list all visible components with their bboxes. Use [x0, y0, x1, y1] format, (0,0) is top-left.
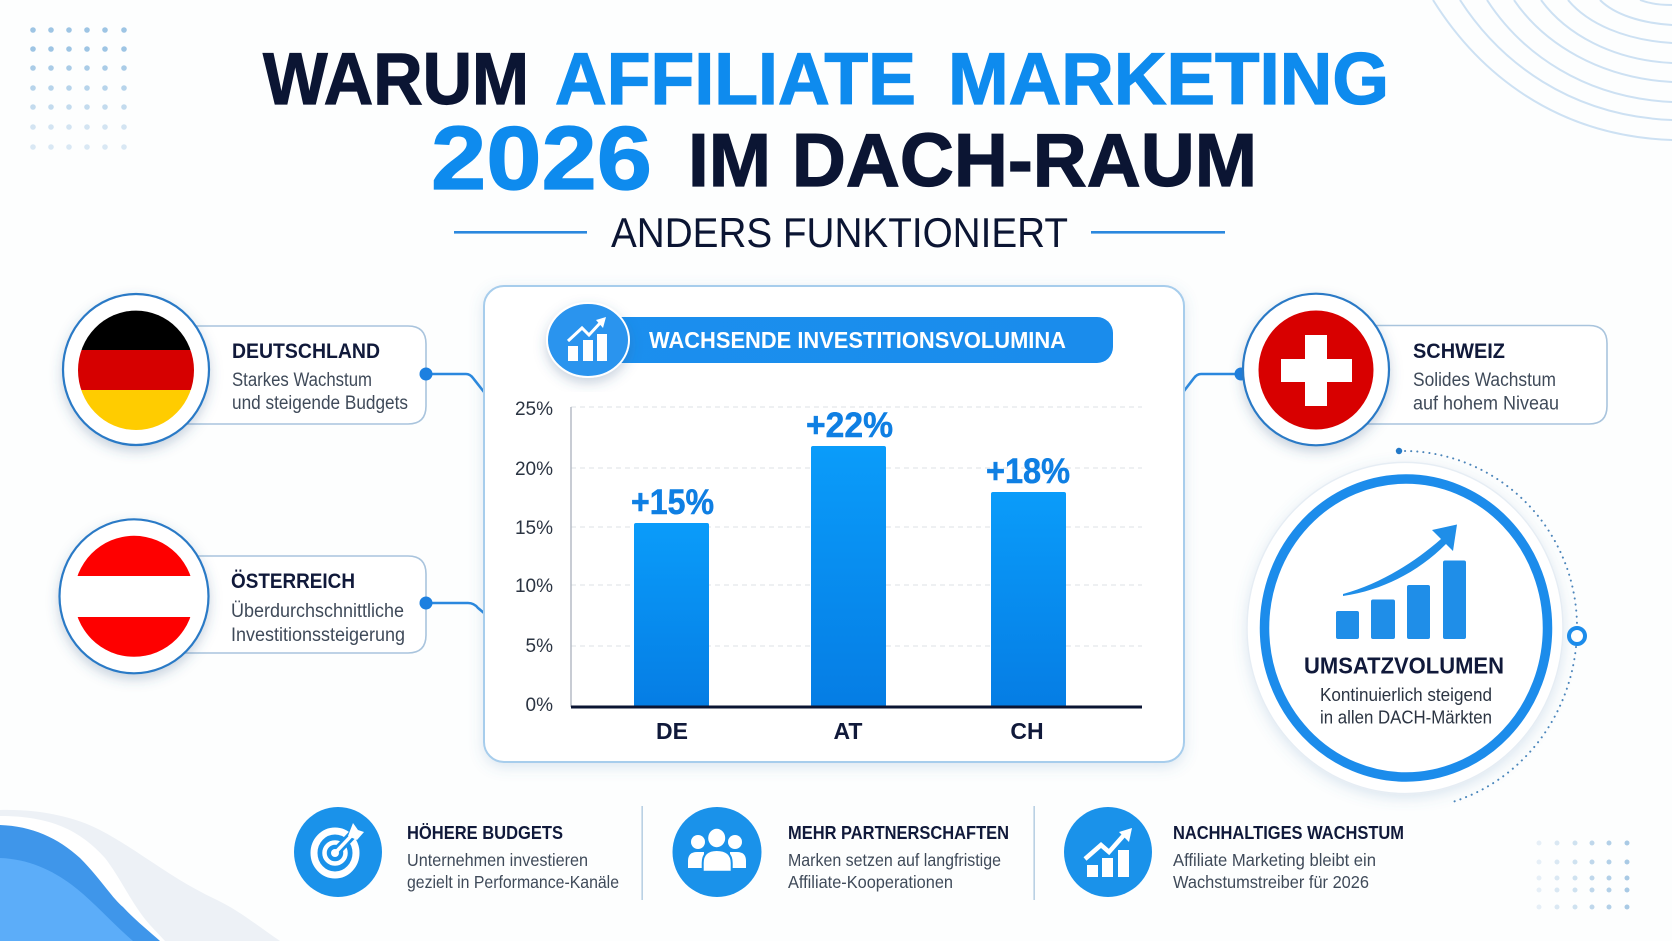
title — [263, 37, 1389, 209]
ring — [1264, 479, 1548, 777]
y axis labels: 15% — [515, 518, 553, 539]
text — [407, 850, 619, 892]
text: Marken setzen auf langfristige — [788, 850, 1001, 870]
subtitle: ANDERS FUNKTIONIERT — [611, 209, 1068, 256]
bar chart — [515, 399, 1142, 744]
card text: auf hohem Niveau — [1413, 394, 1559, 414]
text — [1320, 684, 1492, 728]
heading: MEHR PARTNERSCHAFTEN — [788, 823, 1009, 843]
card text: Überdurchschnittliche — [231, 601, 404, 622]
panel: chart — [484, 286, 1184, 762]
icon: rising bars with arrow — [1336, 524, 1466, 639]
heading: HÖHERE BUDGETS — [407, 823, 563, 843]
title: AFFILIATE — [555, 37, 916, 120]
x axis labels — [656, 718, 1044, 744]
heading: UMSATZVOLUMEN — [1304, 652, 1504, 678]
y axis — [570, 407, 572, 707]
x axis labels: AT — [834, 718, 862, 744]
flag: Deutschland — [63, 294, 209, 445]
chart header: WACHSENDE INVESTITIONSVOLUMINA — [649, 327, 1066, 353]
text: in allen DACH-Märkten — [1320, 706, 1492, 728]
card: Schweiz — [1360, 326, 1607, 424]
card heading: SCHWEIZ — [1413, 339, 1505, 363]
text: gezielt in Performance-Kanäle — [407, 872, 619, 892]
bar: AT: +22% — [806, 406, 893, 445]
decorative dot grid bottom right — [1536, 840, 1630, 910]
text — [788, 850, 1001, 892]
card text — [231, 601, 405, 646]
bar: DE: +15% — [631, 483, 714, 522]
connector dot: Schweiz — [1234, 368, 1248, 380]
dotted orbit — [1396, 448, 1585, 803]
card text: und steigende Budgets — [232, 393, 408, 414]
feature: Nachhaltiges Wachstum — [1064, 807, 1404, 897]
connector: Schweiz — [1184, 374, 1242, 391]
y axis labels — [515, 399, 553, 716]
decorative arcs top right — [1433, 0, 1672, 140]
card: Österreich — [180, 556, 432, 653]
bar: CH — [986, 452, 1070, 707]
bar: DE — [631, 483, 714, 707]
panel: Umsatzvolumen — [1247, 462, 1563, 794]
text: Unternehmen investieren — [407, 850, 588, 870]
heading: NACHHALTIGES WACHSTUM — [1173, 823, 1404, 843]
card text: Investitionssteigerung — [231, 625, 405, 646]
flag: Österreich — [60, 519, 208, 673]
icon: people — [672, 807, 762, 897]
x axis — [571, 706, 1142, 708]
connector: Österreich — [426, 603, 484, 613]
text: Kontinuierlich steigend — [1320, 684, 1492, 705]
flag: Schweiz — [1243, 294, 1389, 445]
feature: Höhere Budgets — [294, 807, 619, 897]
decorative dot grid top left — [30, 27, 127, 150]
decorative waves bottom left — [0, 810, 280, 941]
divider — [1034, 806, 1035, 900]
y axis labels: 5% — [526, 636, 553, 657]
title: WARUM — [263, 37, 529, 120]
y axis labels: 25% — [515, 399, 553, 420]
text: Wachstumstreiber für 2026 — [1173, 872, 1369, 892]
x axis labels: DE — [656, 718, 688, 744]
card: Deutschland — [180, 326, 432, 424]
title: IM DACH-RAUM — [688, 118, 1257, 202]
card text — [1413, 370, 1559, 414]
card text: Starkes Wachstum — [232, 370, 372, 391]
feature: Mehr Partnerschaften — [672, 807, 1009, 897]
text — [1173, 850, 1376, 892]
title: 2026 — [431, 109, 652, 209]
icon: growth chart — [547, 303, 629, 377]
y axis labels: 0% — [526, 695, 553, 716]
connector dot — [420, 596, 432, 610]
connector: Deutschland — [426, 374, 484, 392]
card text — [232, 370, 408, 414]
chart header — [547, 303, 1113, 377]
x axis labels: CH — [1010, 718, 1044, 744]
bar: AT — [806, 406, 893, 707]
text: Affiliate-Kooperationen — [788, 872, 953, 892]
icon: target — [294, 807, 382, 897]
card text: Solides Wachstum — [1413, 370, 1556, 391]
y axis labels: 20% — [515, 459, 553, 480]
card heading: ÖSTERREICH — [231, 568, 355, 593]
icon: growth chart — [1064, 807, 1152, 897]
card heading: DEUTSCHLAND — [232, 339, 380, 363]
bar: CH: +18% — [986, 452, 1070, 491]
gridlines — [571, 407, 1142, 646]
divider — [642, 806, 643, 900]
y axis labels: 10% — [515, 576, 553, 597]
connector dot — [420, 368, 432, 380]
title: MARKETING — [948, 37, 1389, 120]
text: Affiliate Marketing bleibt ein — [1173, 850, 1376, 870]
